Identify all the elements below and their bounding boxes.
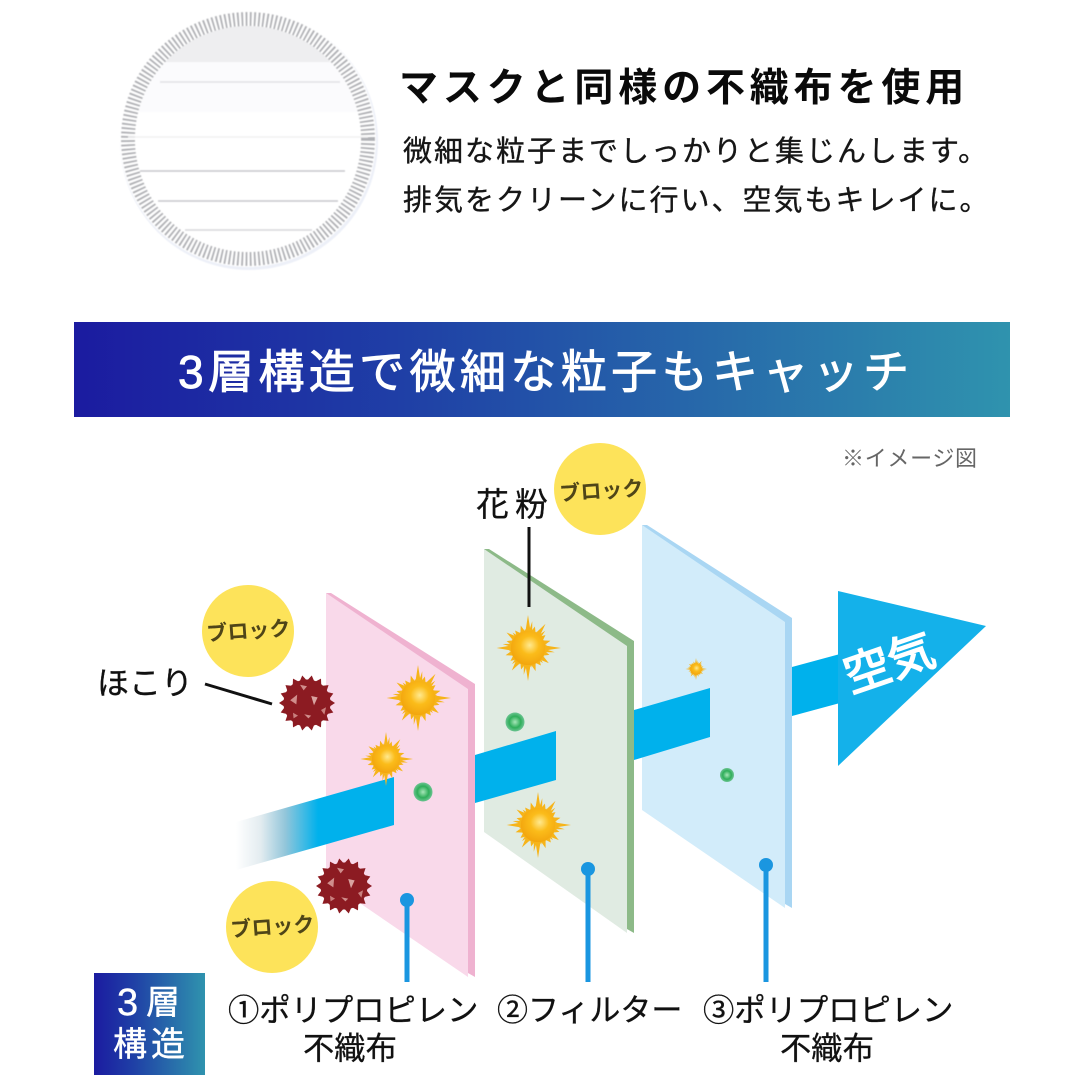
label: pollen <box>476 486 554 607</box>
icon: round non-woven mask fabric <box>120 11 378 270</box>
label: layer 3: ③ポリプロピレン <box>703 993 953 1028</box>
pointers to layers <box>400 858 773 982</box>
callout: block top: ブロック <box>559 476 644 506</box>
particles: fine green particles <box>414 712 734 802</box>
particles: dust <box>279 676 372 913</box>
badge: three layer structure: 3 <box>117 982 138 1024</box>
badge: three layer structure: 構造 <box>113 1026 189 1064</box>
badge: three layer structure: 層 <box>146 984 180 1022</box>
label: pollen: 花粉 <box>476 486 554 523</box>
label: air: 空気 <box>837 623 941 702</box>
callout: block top <box>554 443 646 535</box>
text block: description <box>403 135 991 217</box>
label: layer 1: ①ポリプロピレン <box>228 993 478 1028</box>
panel: polypropylene layer 1 <box>326 593 475 977</box>
heading: mask material: マスクと同様の不織布を使用 <box>399 67 969 110</box>
label: layer 1: 不織布 <box>303 1031 397 1066</box>
arrow: air flow <box>236 591 986 870</box>
text block: description: 微細な粒子までしっかりと集じんします。 <box>403 135 989 168</box>
label: layer 3: 不織布 <box>780 1031 874 1066</box>
label: layer 1 <box>228 993 478 1066</box>
callout: block top left: ブロック <box>206 616 291 646</box>
panel: filter layer 2 <box>484 549 634 933</box>
label: layer 2: ②フィルター <box>497 993 682 1028</box>
panel: polypropylene layer 3 <box>642 525 792 908</box>
badge: three layer structure <box>94 973 205 1075</box>
label: dust <box>97 665 272 704</box>
text block: description: 排気をクリーンに行い、空気もキレイに。 <box>403 184 991 217</box>
callout: block bottom: ブロック <box>230 912 315 942</box>
label: layer 3 <box>703 993 953 1066</box>
label: dust: ほこり <box>97 665 193 701</box>
banner: 3層構造で微細な粒子もキャッチ <box>178 346 914 398</box>
callout: block top left <box>202 585 294 677</box>
banner <box>74 322 1010 417</box>
particles: pollen <box>360 615 707 858</box>
callout: block bottom <box>226 881 318 973</box>
note: image only: ※イメージ図 <box>842 446 978 471</box>
